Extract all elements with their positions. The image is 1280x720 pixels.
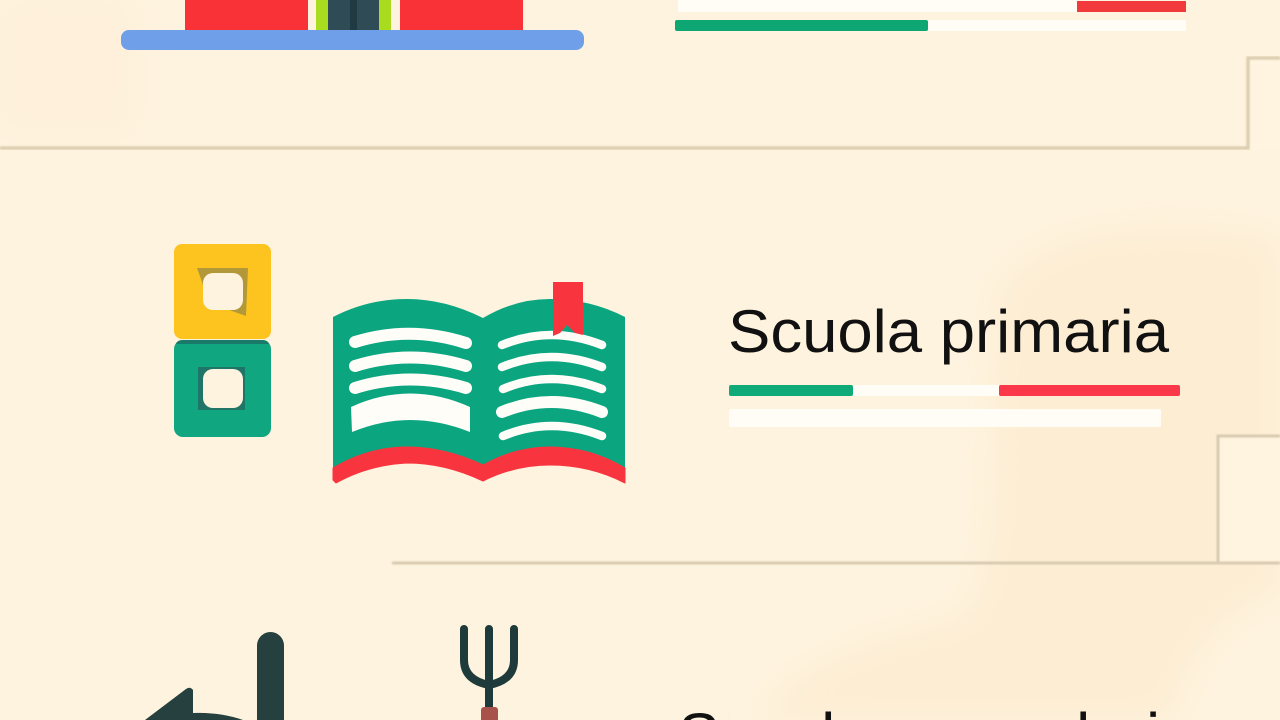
heading: Scuola primaria: Scuola primaria xyxy=(728,298,1170,365)
tricolor bar: Scuola primaria xyxy=(729,385,1180,396)
icon: fork xyxy=(464,629,514,720)
right page text lines xyxy=(502,335,602,436)
white bar: Scuola primaria xyxy=(729,409,1161,427)
progress bars: upper section xyxy=(675,0,1186,31)
panel outline: upper divider xyxy=(0,58,1280,148)
icon: books on shelf xyxy=(121,0,584,50)
bookmark xyxy=(553,282,583,336)
panel outline: lower divider xyxy=(392,436,1280,563)
yellow block xyxy=(174,244,271,339)
left page text block xyxy=(351,394,470,432)
left page text lines xyxy=(355,334,466,388)
icon: stacked blocks xyxy=(174,244,271,437)
icon: open book xyxy=(333,282,625,483)
green block xyxy=(174,340,271,437)
book pages xyxy=(333,299,625,472)
icon: dark hand shape xyxy=(145,632,284,720)
book cover xyxy=(333,447,625,483)
